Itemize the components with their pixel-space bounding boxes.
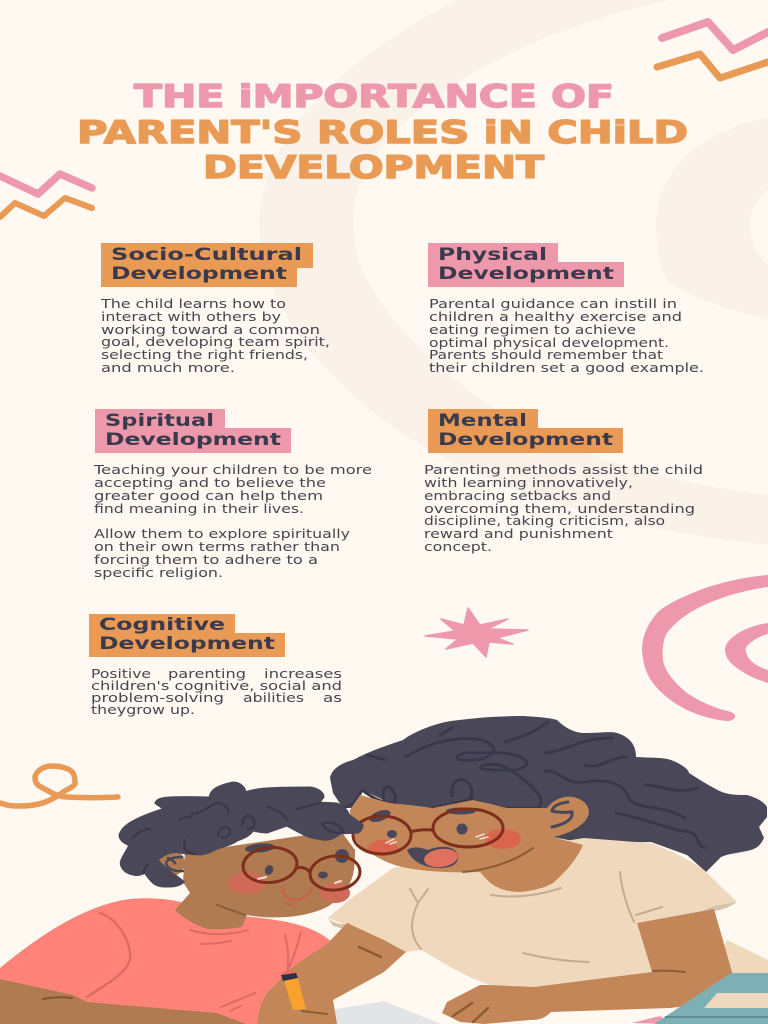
panel: spiritual development xyxy=(93,409,372,580)
decoration: star xyxy=(425,608,528,657)
panel: cognitive development xyxy=(89,614,342,717)
heading: physical: Development xyxy=(438,264,614,283)
text: spiritual body xyxy=(93,463,372,580)
text: mental body: overcoming them, understanding xyxy=(424,502,695,516)
text: physical body: optimal physical development. xyxy=(429,336,669,350)
boy glasses xyxy=(242,845,361,892)
text: physical body xyxy=(429,297,704,375)
text: socio-cultural body: and much more. xyxy=(101,361,235,375)
background spiral xyxy=(259,0,768,545)
mother arms xyxy=(257,909,732,1024)
panel: socio-cultural development xyxy=(100,243,330,375)
mother eyes and brows xyxy=(368,808,476,838)
text: mental body: discipline, taking criticism, also xyxy=(424,514,665,528)
heading: spiritual: Development xyxy=(105,430,281,449)
text: socio-cultural body: selecting the right friends, xyxy=(101,348,308,362)
boy neck line xyxy=(217,905,245,915)
illustration: parent and child xyxy=(0,716,768,1024)
text: cognitive body: Positive xyxy=(91,667,151,681)
title: THE iMPORTANCE OF xyxy=(134,79,614,115)
heading: cognitive: Cognitive xyxy=(99,615,225,634)
paper xyxy=(330,1001,441,1024)
text: socio-cultural body: The child learns how to xyxy=(100,297,286,311)
mother hair curls xyxy=(343,722,705,848)
boy xyxy=(0,783,362,1024)
panel: physical development xyxy=(428,243,704,375)
text: spiritual body: accepting and to believe the xyxy=(94,476,326,490)
text: mental body xyxy=(424,463,703,554)
decoration: left zigzags xyxy=(0,174,92,217)
text: physical body: their children set a good example. xyxy=(429,361,704,375)
text: cognitive body: increases xyxy=(264,667,342,681)
boy eyes and brows xyxy=(245,842,349,878)
boy eye highlights xyxy=(258,877,341,883)
text: socio-cultural body xyxy=(100,297,330,375)
text: spiritual body: find meaning in their lives. xyxy=(94,502,304,516)
mother right arm xyxy=(442,909,732,1024)
boy ear xyxy=(157,850,185,876)
text: cognitive body: problem-solving xyxy=(91,691,224,705)
mother shirt folds xyxy=(410,872,662,962)
text: spiritual body: Allow them to explore spiritually xyxy=(94,527,350,541)
mother shirt xyxy=(328,838,737,987)
mother back xyxy=(700,940,768,1000)
mother smile line xyxy=(463,848,533,872)
heading: mental: Mental xyxy=(438,411,527,430)
text: spiritual body: forcing them to adhere to a xyxy=(94,553,318,567)
heading: socio-cultural xyxy=(101,243,313,287)
mother sleeve shadow xyxy=(328,902,737,930)
boy neck and face xyxy=(175,830,355,929)
mother arm details xyxy=(453,971,685,1022)
heading: cognitive: Development xyxy=(99,634,275,653)
heading: mental xyxy=(428,409,623,453)
text: mental body: concept. xyxy=(424,540,492,554)
text: socio-cultural body: working toward a common xyxy=(101,323,320,337)
heading: physical: Physical xyxy=(438,245,547,264)
text: physical body: children a healthy exercise and xyxy=(429,310,682,324)
mother mouth xyxy=(407,847,459,869)
text: mental body: reward and punishment xyxy=(424,527,613,541)
heading: spiritual: Spiritual xyxy=(105,411,214,430)
heading: mental: Development xyxy=(438,430,613,449)
text: physical body: eating regimen to achieve xyxy=(429,323,636,337)
boy shirt xyxy=(0,898,335,1024)
mother glasses xyxy=(353,809,503,854)
mother eye highlights xyxy=(386,834,488,844)
text: physical body: Parents should remember that xyxy=(429,348,663,362)
book xyxy=(632,973,768,1024)
title xyxy=(77,79,688,186)
heading: cognitive xyxy=(89,614,285,657)
heading: spiritual xyxy=(95,409,291,453)
boy cheeks xyxy=(228,872,350,903)
text: cognitive body: theygrow up. xyxy=(91,703,195,717)
text: cognitive body: children's cognitive, social and xyxy=(91,679,342,693)
heading: physical xyxy=(428,243,624,287)
mother neck and face xyxy=(350,795,583,892)
mother left arm xyxy=(257,923,406,1024)
boy arm xyxy=(0,979,246,1024)
boy shirt folds xyxy=(87,913,301,1011)
text: physical body: Parental guidance can instill in xyxy=(429,297,677,311)
decoration: pink swirl xyxy=(642,575,768,721)
pencil xyxy=(281,970,306,1010)
boy smile xyxy=(282,887,312,905)
boy curls xyxy=(133,803,343,873)
text: spiritual body: greater good can help them xyxy=(94,489,323,503)
mother ear xyxy=(547,797,589,837)
title: PARENT'S ROLES iN CHiLD xyxy=(77,115,688,151)
text: cognitive body: as xyxy=(323,691,342,705)
decoration: top right zigzags xyxy=(657,22,768,78)
title: DEVELOPMENT xyxy=(203,150,544,186)
text: cognitive body xyxy=(91,667,342,717)
text: cognitive body: parenting xyxy=(168,667,246,681)
boy hair xyxy=(120,783,362,886)
decoration: orange loop xyxy=(0,766,118,806)
text: mental body: with learning innovatively, xyxy=(424,476,633,490)
mother hair xyxy=(330,716,767,872)
text: spiritual body: on their own terms rather than xyxy=(94,540,340,554)
mother body and head xyxy=(328,716,767,987)
mother cheeks xyxy=(368,829,521,856)
text: spiritual body: Teaching your children to be more xyxy=(93,463,372,477)
heading: socio-cultural: Development xyxy=(111,264,287,283)
heading: socio-cultural: Socio-Cultural xyxy=(111,245,302,264)
text: spiritual body: specific religion. xyxy=(94,566,223,580)
text: mental body: Parenting methods assist the child xyxy=(424,463,703,477)
panel: mental development xyxy=(424,409,703,554)
text: socio-cultural body: interact with others by xyxy=(101,310,281,324)
text: cognitive body: abilities xyxy=(243,691,304,705)
text: socio-cultural body: goal, developing team spirit, xyxy=(101,335,330,349)
text: mental body: embracing setbacks and xyxy=(424,489,611,503)
